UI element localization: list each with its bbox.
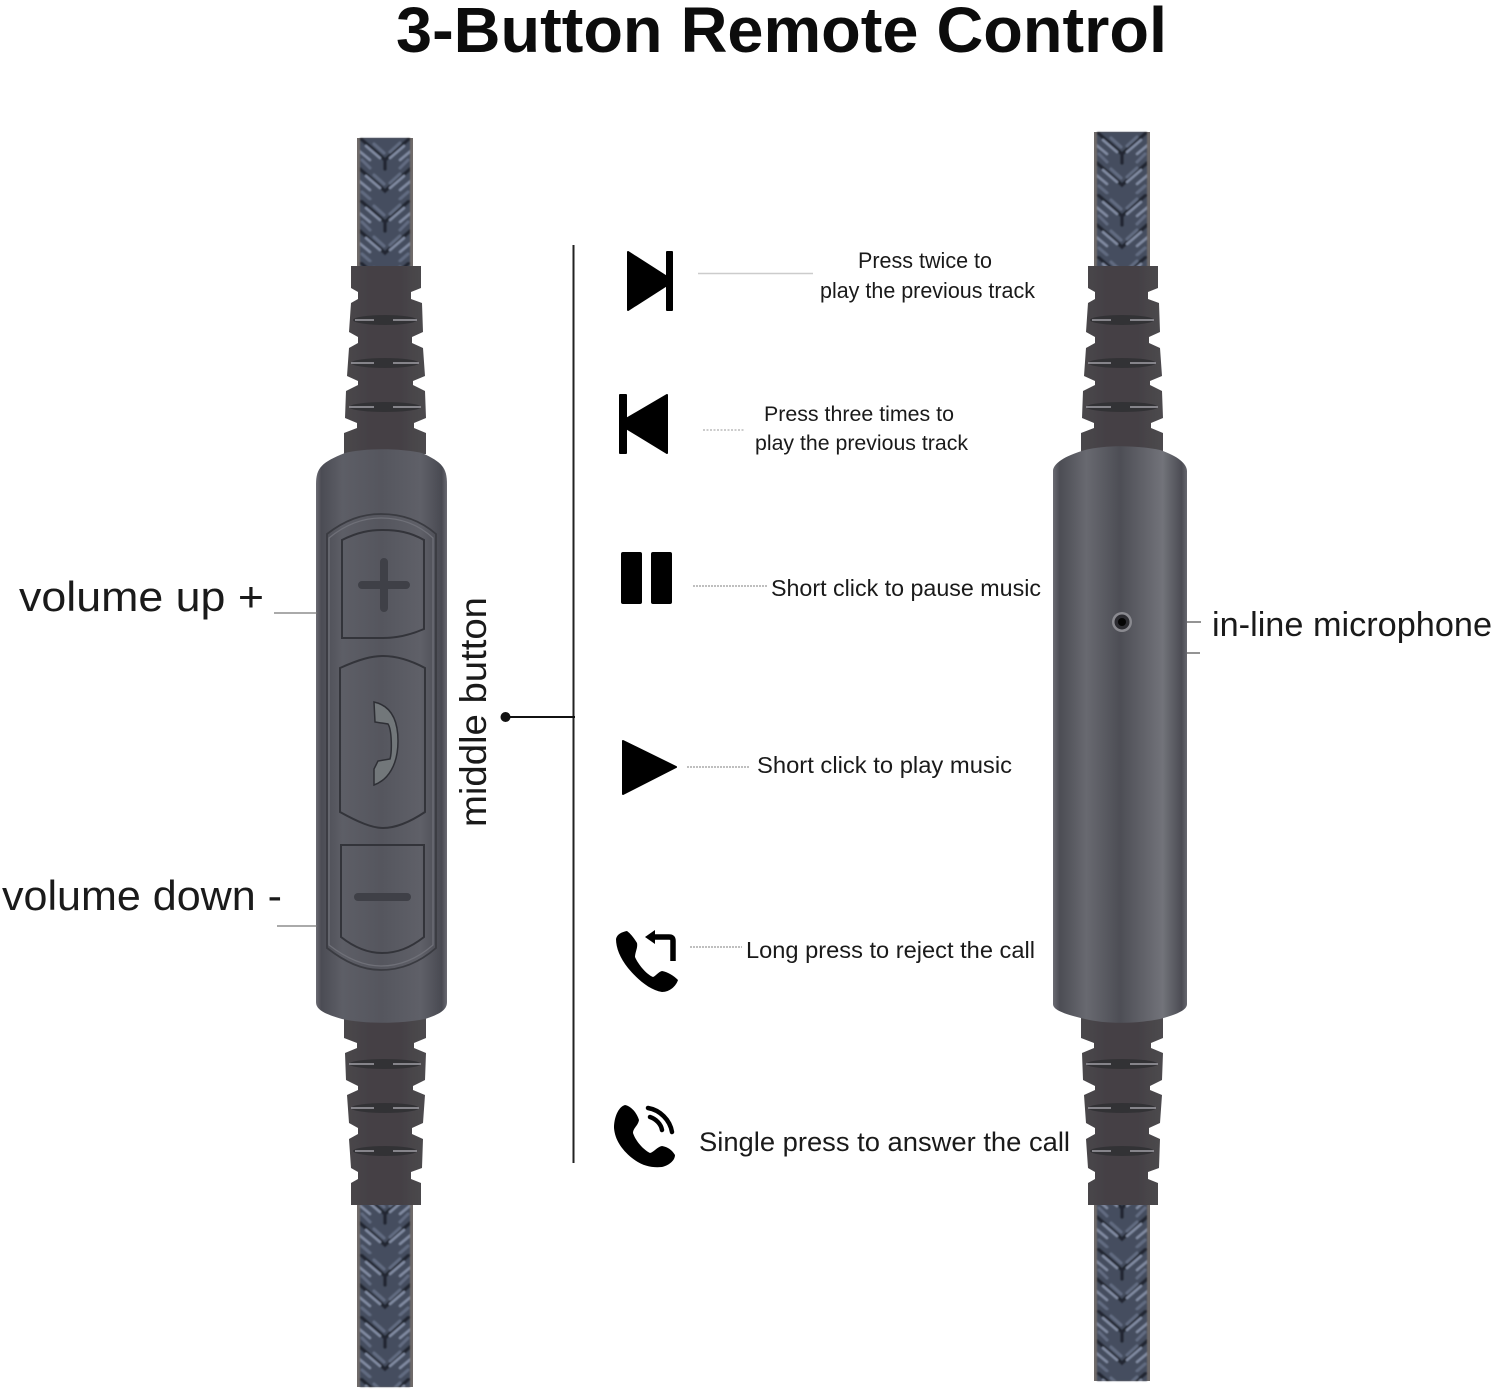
volume down button [341, 845, 424, 953]
dotted leader [687, 766, 750, 768]
strain relief: right bottom [1081, 1017, 1163, 1205]
strain relief: right top [1081, 266, 1163, 454]
function row: pause [621, 552, 1041, 604]
right cable with microphone [1053, 132, 1187, 1381]
strain relief: left bottom [344, 1017, 426, 1205]
label: volume down: volume down - [2, 872, 282, 919]
strain relief: left top [344, 266, 426, 454]
icon: reject call [616, 930, 678, 992]
panel outline [327, 514, 436, 970]
description: Press three times to [764, 403, 954, 426]
volume up button [342, 530, 424, 638]
label: volume up: volume up + [19, 573, 264, 620]
description: Long press to reject the call [746, 937, 1035, 963]
description: Press twice to [858, 248, 992, 273]
label: middle button: middle button [453, 597, 494, 827]
description: Short click to pause music [771, 575, 1041, 601]
leader line: volume down [277, 925, 317, 927]
function row: previous track [620, 395, 968, 455]
dotted leader [703, 429, 745, 431]
panel highlight [329, 518, 433, 966]
description: Single press to answer the call [699, 1127, 1070, 1157]
left cable with remote buttons [316, 138, 447, 1387]
call button [340, 656, 425, 828]
description: play the previous track [755, 432, 968, 455]
braided cable: right top [1094, 132, 1150, 268]
dotted leader [690, 946, 742, 948]
icon: previous track [620, 395, 667, 453]
leader line: volume up [274, 612, 317, 614]
braided cable: left bottom [357, 1203, 413, 1387]
plus sign [362, 562, 406, 608]
description: Short click to play music [757, 752, 1012, 778]
braided cable: left top [357, 138, 413, 268]
description [820, 248, 1036, 303]
braided cable: right bottom [1094, 1203, 1150, 1381]
icon: play [623, 741, 676, 794]
function row: reject call [616, 930, 1035, 992]
description: play the previous track [820, 278, 1036, 303]
dotted leader [693, 585, 767, 587]
microphone hole [1112, 612, 1132, 632]
phone symbol [374, 702, 398, 785]
leader lines: microphone [1187, 622, 1201, 653]
label: in-line microphone: in-line microphone [1212, 606, 1492, 644]
function row: play [623, 741, 1012, 794]
description [755, 403, 968, 455]
minus sign [358, 893, 407, 901]
icon: answer call [614, 1105, 675, 1167]
remote body: left [316, 449, 447, 1023]
button panel [327, 514, 436, 970]
dotted leader [698, 272, 813, 274]
icon: next track [628, 252, 672, 310]
function row: answer call [614, 1105, 1070, 1167]
remote body: right [1053, 446, 1187, 1023]
function row: next track [628, 248, 1036, 310]
bracket: middle button functions [500, 245, 575, 1163]
icon: pause [621, 552, 672, 604]
